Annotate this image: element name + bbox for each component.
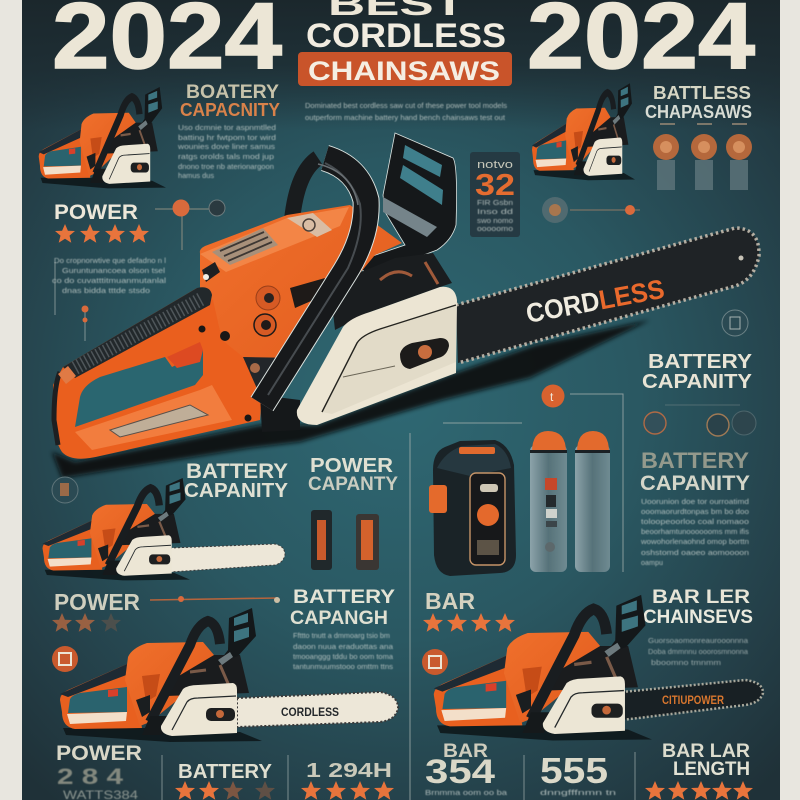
label: battery capanity row 3 — [184, 460, 289, 502]
stat: bar length: BAR LAR — [662, 741, 750, 762]
label: battery capanity upper right: CAPANITY — [642, 371, 753, 393]
battery cylinder right — [575, 431, 610, 572]
chain cover — [297, 287, 457, 425]
stat: bar length: LENGTH — [673, 759, 750, 780]
stat: 1294h — [301, 760, 394, 800]
label: battery capanity faded: BATTERY — [641, 448, 749, 473]
label: battery capanity upper right: BATTERY — [648, 351, 753, 373]
stat: bar 354 — [425, 741, 508, 797]
text block: power: dnas bidda tttde stsdo — [62, 286, 150, 295]
battery pack — [429, 440, 516, 576]
connector nodes: power — [155, 200, 225, 250]
dividers bottom row — [162, 752, 635, 800]
note box with number 32: 32 — [475, 167, 515, 202]
stat: power: POWER — [56, 742, 142, 765]
saw bottom left: white bar: CORDLESS — [281, 705, 339, 719]
orange icon: bar — [422, 649, 448, 675]
label: bar ler chainsevs: CHAINSEVS — [643, 607, 753, 628]
label: power row 4 with faded stars — [52, 589, 140, 632]
text block: row 4 left: daoon nuua eraduottas ana — [293, 642, 394, 651]
text block: row 4 right — [648, 636, 749, 667]
label: power row 4 with faded stars: POWER — [54, 589, 140, 615]
text block: row 4 right: Doba dmmnnu ooorosmnonna — [648, 647, 749, 656]
label: boatery capacity: CAPACNITY — [180, 100, 280, 120]
label: battery capanity row 3: CAPANITY — [184, 480, 289, 502]
callout node and leader lines: t — [550, 390, 554, 404]
rear handle — [53, 287, 300, 459]
text block: top left: hamus dus — [178, 171, 214, 180]
text block: battery — [640, 497, 749, 567]
label: battless chapasaws: CHAPASAWS — [645, 102, 752, 122]
text block: power — [52, 256, 166, 295]
rear leg of front handle — [292, 158, 318, 220]
label: bar ler chainsevs: BAR LER — [652, 587, 750, 608]
text block: power: Guruntunancoea olson tsel — [62, 266, 165, 275]
main chainsaw — [52, 133, 759, 478]
intro paragraph: outperform machine battery hand bench chainsaws test out — [305, 113, 506, 122]
label: battless chapasaws: BATTLESS — [653, 83, 751, 103]
text block: battery: oampu — [641, 558, 663, 567]
text block: top left: batting hr fwtpom tor wird — [178, 133, 276, 142]
text block: power: Do cropnorwtive que defadno n l — [54, 256, 166, 265]
text block: battery: ooomaorurdtonpas bm bo doo — [641, 507, 749, 516]
text block: top left: Uso dcmnie tor aspnmtlled — [178, 123, 276, 132]
text block: battery: Uoorunion doe tor ourroatimd — [641, 497, 749, 506]
label: bar with stars — [423, 588, 515, 632]
small icon: right — [722, 310, 748, 336]
stat: 1294h: 1 294H — [306, 760, 392, 782]
text block: power: co do cuvatttitmuanmutanlal — [52, 276, 166, 285]
label: battery capanity faded — [640, 448, 750, 495]
saw row 3: white bar — [42, 478, 285, 580]
note box with number 32: Inso dd — [477, 207, 513, 216]
label: battery capangh: CAPANGH — [290, 608, 388, 629]
label: power with rating: POWER — [54, 201, 138, 224]
note box with number 32: notvo — [477, 159, 513, 171]
label: boatery capacity — [180, 82, 280, 120]
title banner: chainsaws — [298, 52, 512, 86]
text block: row 4 left: tmooanggg tddu bo oom toma — [293, 652, 394, 661]
dark top band — [22, 0, 780, 130]
stat: battery — [175, 761, 275, 800]
note box with number 32: swo nomo — [477, 216, 513, 225]
text block: row 4 right: bboomno tmnmm — [651, 658, 721, 667]
text block: battery: wowohorlenaohnd omop borttn — [640, 537, 749, 546]
stat: battery: BATTERY — [178, 761, 273, 783]
title banner: chainsaws: CHAINSAWS — [308, 56, 500, 86]
guide bar: CORDLESS — [524, 274, 667, 329]
guide bar — [456, 228, 759, 363]
stat: 555: dnngfffnmn tn — [540, 788, 616, 797]
label: power capanty: CAPANTY — [308, 474, 398, 495]
label: boatery capacity: BOATERY — [186, 82, 279, 103]
text block: top left: ratgs orolds tals mod jup — [178, 152, 274, 161]
marker pins — [55, 262, 88, 341]
orange body — [200, 205, 402, 402]
connector row 4 — [150, 596, 280, 603]
stat: power — [56, 742, 142, 800]
saw bottom right: black bar: CITIUPOWER — [662, 693, 724, 707]
intro paragraph: Dominated best cordless saw cut of these power tool models — [305, 101, 507, 110]
icon row — [644, 405, 756, 436]
hand guard — [355, 133, 457, 280]
text block: top left: dnono troe nb aterionargoon — [178, 162, 274, 171]
shadow — [52, 320, 650, 478]
text block: battery: toloopeoorloo coal nomaoo — [641, 517, 749, 526]
text block: row 4 left: Ffttto tnutt a dmmoarg tsio bm — [293, 631, 390, 640]
stat: bar 354: BAR — [443, 741, 488, 762]
label: battery capanity faded: CAPANITY — [640, 472, 750, 495]
stat: bar 354: 354 — [425, 753, 495, 791]
text block: row 4 left — [293, 631, 394, 671]
medal icons — [653, 124, 752, 190]
mini saw: top left — [39, 87, 166, 188]
label: power with rating — [54, 201, 149, 243]
label: battery capanity upper right — [642, 351, 753, 393]
stat: bar length — [645, 741, 753, 800]
label: power capanty — [308, 455, 398, 495]
connector nodes: right — [542, 197, 640, 223]
text block: top left — [177, 123, 276, 180]
text block: row 4 right: Guorsoaomonreaurooonnna — [648, 636, 749, 645]
note box with number 32 — [470, 152, 520, 237]
stat: power: 2 8 4 — [57, 764, 124, 789]
small batteries — [311, 510, 379, 570]
orange icon: power — [52, 646, 78, 672]
label: bar with stars: BAR — [425, 588, 475, 614]
label: battery capangh: BATTERY — [293, 587, 395, 608]
saw bottom left: white bar — [60, 608, 398, 742]
text block: row 4 left: tantunmuumstooo omttm ttns — [293, 662, 393, 671]
saw bottom right: black bar — [434, 595, 763, 741]
label: battery capangh — [290, 587, 395, 629]
text block: battery: oshstomd oaoeo aomoooon — [641, 548, 749, 557]
text block: battery: beoorhamtunooooooms mm ifis — [641, 527, 749, 536]
label: battless chapasaws — [645, 83, 752, 122]
small icon: row 3 — [52, 477, 78, 503]
label: power capanty: POWER — [310, 455, 394, 477]
mini saw: top right — [532, 83, 635, 180]
label: battery capanity row 3: BATTERY — [186, 460, 288, 483]
stat: 555 — [540, 750, 616, 797]
label: bar ler chainsevs — [643, 587, 753, 628]
title: cordless: CORDLESS — [306, 17, 506, 55]
note box with number 32: ooooomo — [477, 224, 513, 233]
front handle — [262, 158, 366, 404]
stat: 555: 555 — [540, 750, 608, 791]
note box with number 32: FIR Gsbn — [477, 198, 513, 207]
engine internals — [330, 253, 452, 330]
stat: bar 354: Brnmma oom oo ba — [425, 788, 508, 797]
callout node and leader lines — [410, 384, 623, 800]
intro paragraph — [305, 101, 507, 122]
battery cylinder left — [530, 431, 567, 572]
text block: top left: wounies dove liner samus — [177, 142, 275, 151]
